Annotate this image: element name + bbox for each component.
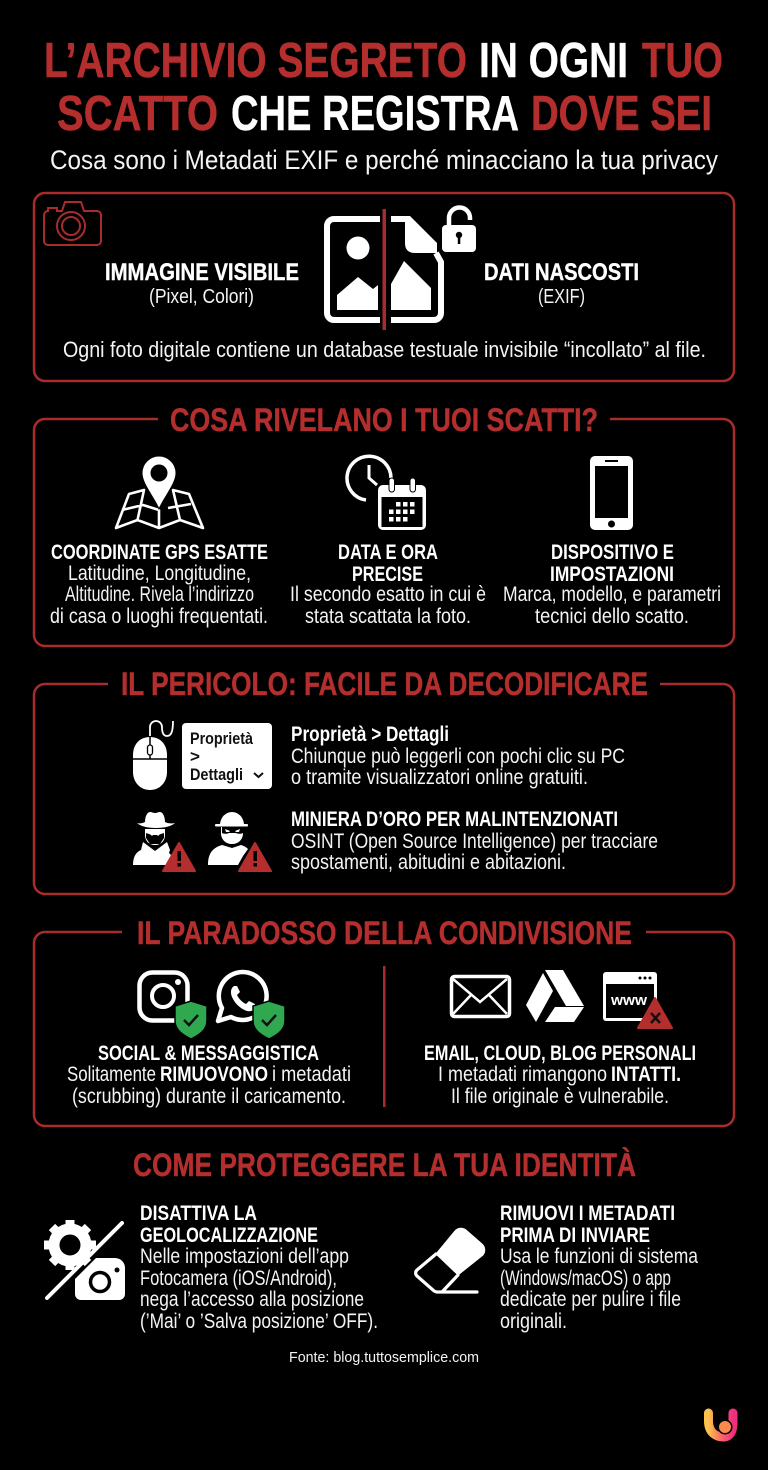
text: remove metadata: (Windows/macOS) o app [500,1267,671,1290]
source: Fonte: blog.tuttosemplice.com [289,1349,479,1366]
text: gold mine: OSINT (Open Source Intelligence) per tracciare [291,830,658,853]
label: visible image [105,259,299,308]
dropdown: Proprietà > Dettagli: Dettagli [190,765,243,784]
heading: how to protect: COME PROTEGGERE LA TUA IDENTITÀ [133,1147,636,1183]
title [44,34,723,141]
icon: camera [44,202,101,245]
panel: the danger [34,666,734,894]
text: gold mine: spostamenti, abitudini e abitazioni. [291,851,566,874]
title: SCATTO [57,87,218,141]
text: social and messaging: RIMUOVONO [160,1063,268,1086]
text: social and messaging [67,1042,351,1108]
text: disable geolocation: nega l’accesso alla posizione [140,1288,364,1311]
text: disable geolocation: DISATTIVA LA [140,1202,257,1225]
icon: burglar with warning [208,812,271,871]
text: remove metadata: PRIMA DI INVIARE [500,1224,650,1247]
icon: image and file split [327,209,441,330]
label: hidden data: (EXIF) [538,286,585,308]
icon: spy with warning [133,812,195,871]
text: remove metadata: dedicate per pulire i file [500,1288,681,1311]
column: date and time: Il secondo esatto in cui è [290,583,486,606]
text: email, cloud, blogs: I metadati rimangono [438,1063,607,1086]
text: properties: Chiunque può leggerli con pochi clic su PC [291,745,625,768]
column: device and settings: Marca, modello, e parametri [503,583,721,606]
icon: browser with error: www [610,992,647,1009]
text: email, cloud, blogs: INTATTI. [611,1063,681,1086]
column: date and time: PRECISE [352,563,423,586]
text: disable geolocation [140,1202,378,1333]
icon: mouse [133,721,173,790]
icon: envelope [452,976,510,1016]
text: disable geolocation: GEOLOCALIZZAZIONE [140,1224,318,1247]
text: gold mine: MINIERA D’ORO PER MALINTENZIONATI [291,808,618,831]
title: L’ARCHIVIO SEGRETO [44,34,467,88]
icon: gear and camera crossed out [44,1220,127,1301]
text: social and messaging: SOCIAL & MESSAGGISTICA [98,1042,319,1065]
dropdown: Proprietà > Dettagli: > [190,747,200,766]
column: GPS coordinates [50,541,268,628]
title: TUO [642,34,723,88]
column: GPS coordinates: di casa o luoghi frequentati. [50,605,268,628]
heading: IL PARADOSSO DELLA CONDIVISIONE [137,915,632,951]
text: social and messaging: i metadati [272,1063,351,1086]
dropdown: Proprietà > Dettagli [182,723,272,789]
icon: map pin [116,456,203,528]
column: device and settings: DISPOSITIVO E [551,541,674,564]
icon: smartphone [590,456,633,530]
text: remove metadata: RIMUOVI I METADATI [500,1202,675,1225]
text: social and messaging: (scrubbing) durante il caricamento. [72,1085,346,1108]
column: GPS coordinates: Latitudine, Longitudine, [68,562,251,585]
heading: COSA RIVELANO I TUOI SCATTI? [170,402,598,438]
icon: instagram with shield [140,972,207,1039]
column: device and settings: IMPOSTAZIONI [550,563,674,586]
text: disable geolocation: Fotocamera (iOS/Android), [140,1267,337,1290]
text: remove metadata: Usa le funzioni di sistema [500,1245,698,1268]
label: visible image: (Pixel, Colori) [149,286,254,308]
icon: eraser [416,1228,485,1292]
heading: IL PERICOLO: FACILE DA DECODIFICARE [121,666,648,702]
column: device and settings [503,541,721,628]
icon: cloud drive [526,970,584,1022]
icon: clock and calendar [347,456,426,530]
column: GPS coordinates: COORDINATE GPS ESATTE [51,541,268,564]
text: properties [291,723,625,789]
icon: whatsapp with shield [218,972,285,1039]
label: visible image: IMMAGINE VISIBILE [105,259,299,286]
text: remove metadata [500,1202,698,1333]
text: remove metadata: originali. [500,1310,567,1333]
text: email, cloud, blogs: Il file originale è vulnerabile. [451,1085,669,1108]
text: gold mine [291,808,658,874]
text: disable geolocation: (’Mai’ o ’Salva posizione’ OFF). [140,1310,378,1333]
panel: visible image and hidden data [34,193,734,381]
text: properties: Proprietà > Dettagli [291,723,449,746]
column: GPS coordinates: Altitudine. Rivela l’indirizzo [65,583,254,606]
text: disable geolocation: Nelle impostazioni dell’app [140,1245,349,1268]
icon: logo [708,1413,733,1437]
title: CHE REGISTRA [231,87,519,141]
panel: what your photos reveal [34,402,734,646]
column: date and time: stata scattata la foto. [305,605,471,628]
text: email, cloud, blogs [424,1042,696,1108]
caption: Ogni foto digitale contiene un database testuale invisibile “incollato” al file. [63,337,706,362]
title: DOVE SEI [531,87,712,141]
column: device and settings: tecnici dello scatto. [535,605,689,628]
column: date and time [290,541,486,628]
dropdown: Proprietà > Dettagli: Proprietà [190,729,253,748]
icon: open padlock [442,208,476,252]
label: hidden data: DATI NASCOSTI [484,259,639,286]
text: email, cloud, blogs: EMAIL, CLOUD, BLOG PERSONALI [424,1042,696,1065]
text: social and messaging: Solitamente [67,1063,156,1086]
title: IN OGNI [479,34,628,88]
label: hidden data [484,259,639,308]
column: date and time: DATA E ORA [338,541,438,564]
icon: browser with error [603,972,672,1028]
panel: the sharing paradox [34,915,734,1126]
text: properties: o tramite visualizzatori online gratuiti. [291,766,588,789]
